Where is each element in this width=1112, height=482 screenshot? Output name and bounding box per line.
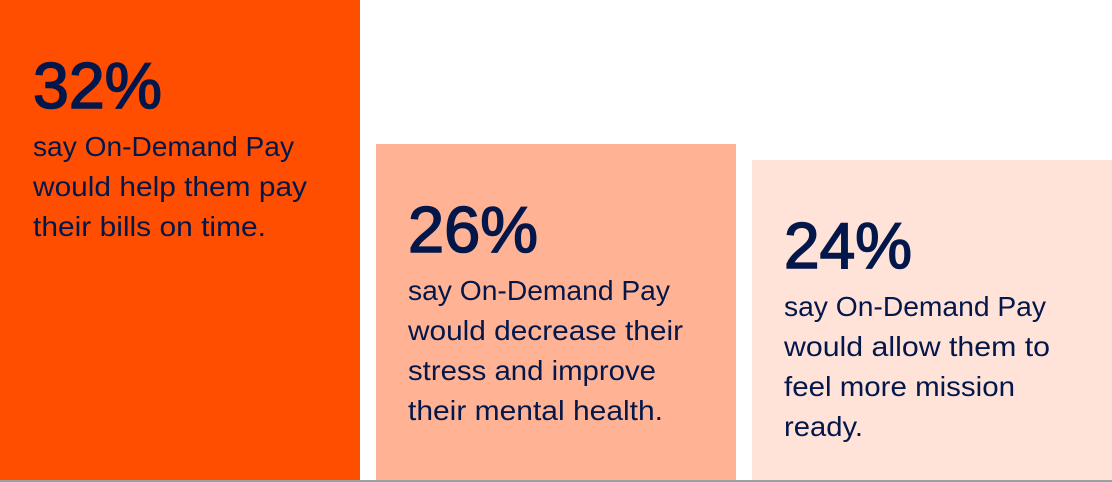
stat: 24%: 24% bbox=[784, 209, 912, 282]
description: pay bills on time: would help them pay bbox=[32, 171, 307, 202]
panel background peach bbox=[376, 144, 736, 480]
description: decrease stress: stress and improve bbox=[408, 355, 656, 386]
stat: 26%: 26% bbox=[408, 193, 538, 266]
description: mission ready: ready. bbox=[784, 411, 863, 442]
description: pay bills on time: their bills on time. bbox=[33, 211, 266, 242]
panel background pale peach bbox=[752, 160, 1112, 480]
bottom rule bbox=[0, 480, 1112, 482]
description: decrease stress: their mental health. bbox=[408, 395, 663, 426]
panel: 26 percent bbox=[376, 144, 736, 480]
panel: 24 percent bbox=[752, 160, 1112, 480]
description: mission ready: feel more mission bbox=[784, 371, 1015, 402]
description: mission ready: say On-Demand Pay bbox=[784, 291, 1046, 322]
description: mission ready: would allow them to bbox=[783, 331, 1050, 362]
panel: 32 percent bbox=[0, 0, 360, 480]
description: decrease stress: would decrease their bbox=[407, 315, 683, 346]
description: pay bills on time: say On-Demand Pay bbox=[33, 131, 294, 162]
panel background orange bbox=[0, 0, 360, 480]
description: decrease stress: say On-Demand Pay bbox=[408, 275, 670, 306]
stat: 32%: 32% bbox=[33, 49, 162, 122]
description: mission ready bbox=[783, 291, 1050, 442]
description: decrease stress bbox=[407, 275, 683, 426]
description: pay bills on time bbox=[32, 131, 307, 242]
